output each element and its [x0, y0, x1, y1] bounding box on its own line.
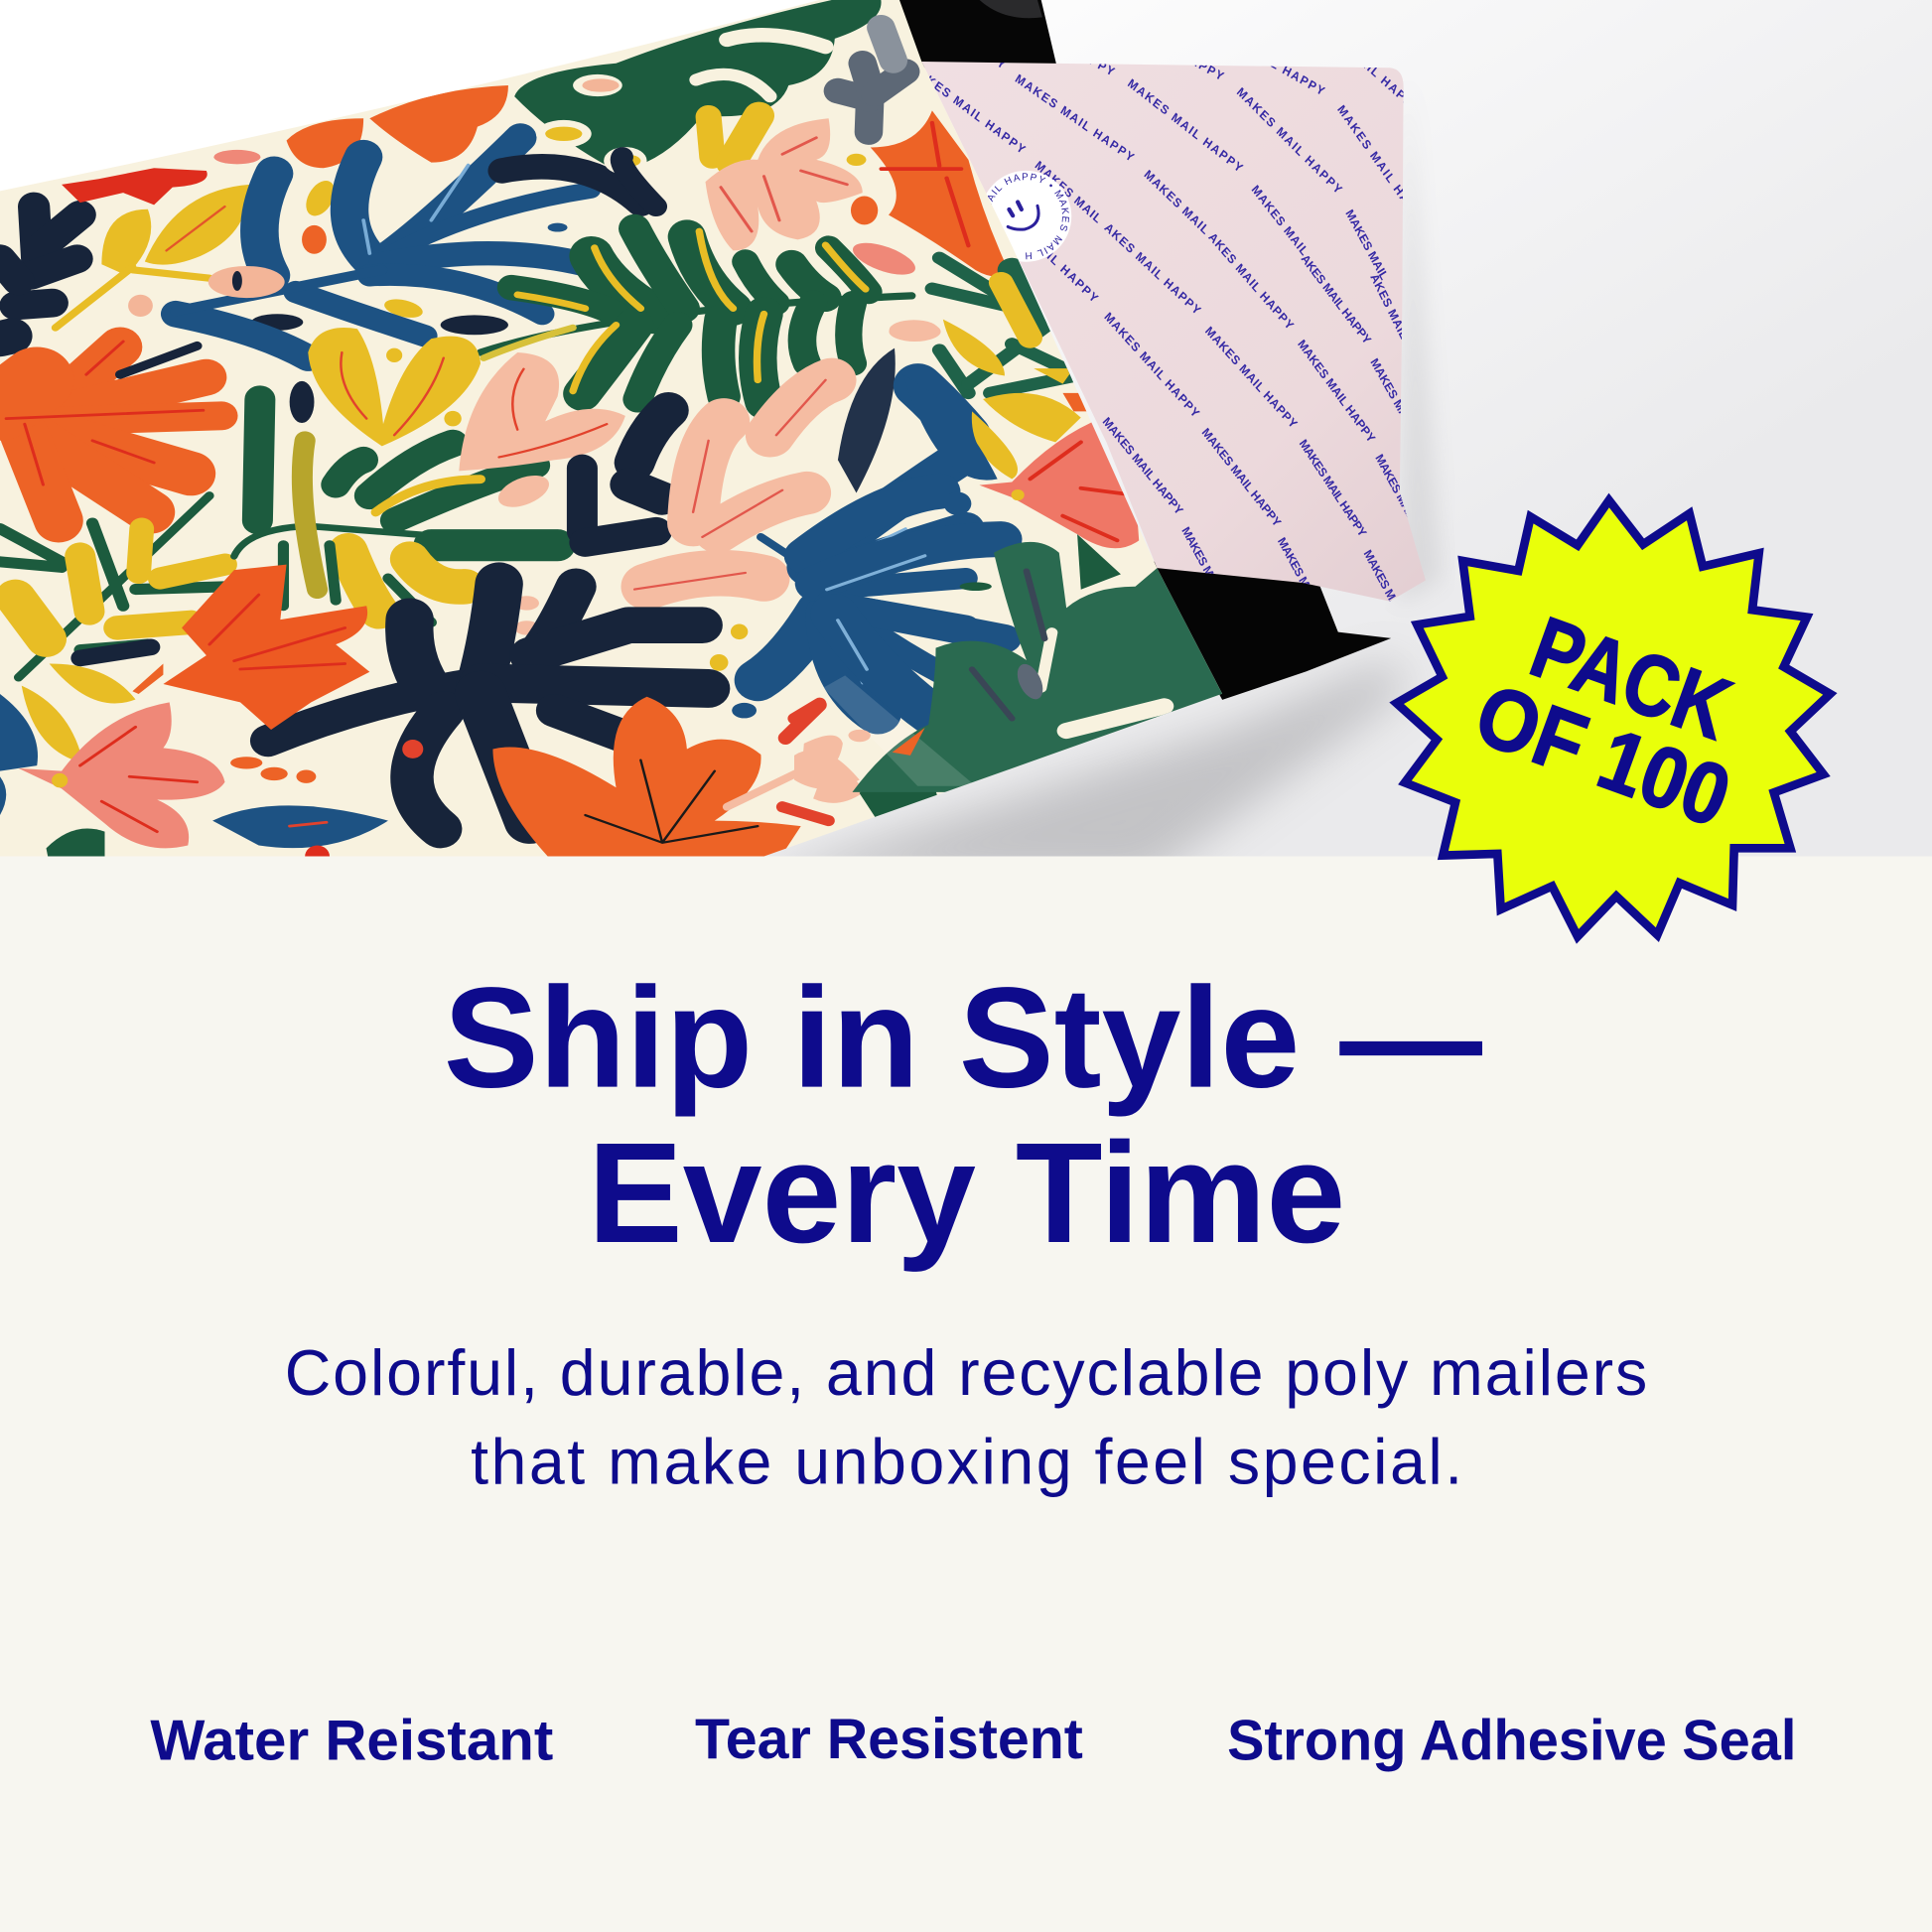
- red flower, top left: [62, 168, 207, 205]
- mailer shadows: [740, 73, 1442, 881]
- blue palm fronds, right: [805, 491, 1005, 725]
- studio backdrop: [0, 0, 1932, 857]
- feature labels: [150, 1708, 1796, 1772]
- repeated brand pattern: MAKES MAIL HAPPY: [1202, 324, 1300, 431]
- repeated brand pattern: MAKES MAIL HAPPY: [1295, 337, 1378, 445]
- black adhesive strip, bottom: [1146, 561, 1391, 700]
- small dots, lower centre: [514, 596, 819, 738]
- navy fern, upper left: [0, 207, 80, 339]
- pink inner mailer: [0, 0, 1479, 696]
- heading: [444, 958, 1482, 1273]
- repeated brand pattern: MAKES MAIL: [1342, 207, 1391, 282]
- floral artwork, right side: [794, 110, 1222, 792]
- subheading: [285, 1337, 1647, 1497]
- cream mailer base: [0, 0, 1232, 857]
- green and yellow branch, lower left: [0, 495, 228, 677]
- product photo panel: [0, 0, 1932, 856]
- repeated brand pattern: MAKES MAIL HAPPY: [1372, 452, 1439, 560]
- navy coral plant: [268, 584, 709, 829]
- dark navy leaves, centre: [582, 410, 668, 542]
- subheading: Colorful, durable, and recyclable poly mailers: [285, 1337, 1647, 1409]
- green fern, centre: [481, 228, 911, 402]
- black adhesive strip, top: [894, 0, 1057, 68]
- starburst shape: [1397, 500, 1830, 936]
- starburst badge: pack of 100: [1397, 500, 1830, 936]
- badge text: OF 100: [1463, 665, 1742, 846]
- repeated brand pattern: MAKES MAIL: [1142, 167, 1212, 237]
- repeated brand pattern: MAKES MAIL HAPPY: [1307, 9, 1422, 116]
- grey-navy sprig, top right: [838, 28, 905, 132]
- film sheen: [823, 675, 976, 786]
- repeated brand pattern: MAKES MAIL HAPPY: [906, 60, 1028, 157]
- blue wedge leaf: [903, 374, 998, 481]
- peach sprig and orange drop, lower edge: [794, 703, 925, 789]
- repeated brand pattern: MAKES MAIL HAPPY: [1178, 524, 1245, 632]
- peach flower, top: [706, 118, 863, 250]
- green monstera, bottom right: [852, 534, 1222, 792]
- orange flower, lower left: [163, 565, 369, 730]
- repeated brand pattern: MAKES MAIL HAPPY: [1334, 102, 1429, 230]
- repeated brand pattern: MAKES MAIL HAPPY: [1125, 76, 1245, 175]
- feature: tear resistant: Tear Resistent: [695, 1708, 1083, 1771]
- navy branch, top centre: [502, 167, 640, 204]
- repeated brand pattern: MAKES MAIL HAPPY: [1198, 16, 1327, 98]
- orange flower, bottom centre: [492, 697, 801, 864]
- floral outer mailer: [0, 0, 1232, 868]
- repeated brand pattern: MAKES MAIL HAPPY: [1013, 71, 1137, 165]
- repeated brand pattern: MAKES MAIL HAPPY: [1102, 310, 1202, 420]
- repeated brand pattern: AKES MAIL HAPPY: [1205, 230, 1297, 333]
- green monstera, top: [514, 0, 882, 207]
- big orange flower, left: [0, 342, 221, 520]
- repeated brand pattern: MAKES MAIL HAPPY: [1275, 535, 1341, 643]
- big peach leaves, centre right: [634, 380, 832, 590]
- feature: water resistant: Water Reistant: [150, 1709, 553, 1772]
- repeated brand pattern: MAKES MAIL HAPPY: [1367, 355, 1439, 470]
- repeated brand pattern: MAKES MAIL: [1249, 183, 1311, 258]
- peach sprig, bottom right: [727, 726, 949, 837]
- repeated brand pattern: MAKES MAIL HAPPY: [1199, 425, 1284, 529]
- floral artwork, left and centre: [0, 0, 966, 868]
- blue fern: [176, 138, 592, 358]
- blue dot: [944, 491, 971, 515]
- badge text: PACK: [1519, 598, 1742, 759]
- blue leaf, bottom: [0, 694, 388, 868]
- repeated brand pattern: MAKES MAIL HAPPY: [1100, 414, 1186, 517]
- navy spear leaf: [838, 348, 896, 493]
- centre palm frond: [234, 441, 558, 622]
- yellow heart leaves: [308, 328, 481, 446]
- feature: adhesive seal: Strong Adhesive Seal: [1227, 1709, 1796, 1772]
- repeated brand pattern: AKES MAIL HAPPY: [1102, 220, 1203, 318]
- small orange dots, bottom: [132, 663, 423, 783]
- repeated brand pattern: MAKES MAIL HAPPY: [1234, 84, 1345, 197]
- repeated brand pattern: MAKES MAIL HAPPY: [1297, 437, 1369, 539]
- green stalk and navy oval: [257, 381, 314, 520]
- repeated brand pattern: MAKES MAIL HAPPY: [1097, 1, 1226, 83]
- peach bud with navy eye: [128, 266, 285, 317]
- repeated brand pattern: MAKES MAIL HAPPY: [989, 196, 1101, 306]
- subheading: that make unboxing feel special.: [471, 1426, 1462, 1497]
- repeated brand pattern: AKES MAIL HAPPY: [1367, 271, 1433, 384]
- repeated brand pattern: MAKES MAIL: [1033, 158, 1104, 226]
- coral flower, by the edge: [979, 418, 1139, 548]
- smiley sticker: [987, 171, 1072, 262]
- coral flower, lower left: [19, 702, 224, 848]
- yellow butterfly bloom: [709, 115, 759, 163]
- orange blooms, top edge: [287, 85, 508, 168]
- blue palm, lower right: [758, 385, 966, 713]
- orange flower, upper right: [871, 110, 1009, 276]
- navy twig: [120, 345, 198, 374]
- heading: Every Time: [588, 1113, 1345, 1273]
- coral blob and dots: [213, 150, 568, 335]
- repeated brand pattern: AKES MAIL HAPPY: [1299, 252, 1374, 346]
- orange drop and small dots: [847, 154, 941, 342]
- badge text: [1463, 598, 1742, 846]
- heading: Ship in Style —: [444, 958, 1482, 1118]
- peach heart leaf: [459, 352, 625, 513]
- yellow petals, lower left: [22, 663, 136, 762]
- pink mailer body: [921, 62, 1426, 602]
- green sprigs and yellow leaves: [890, 258, 1092, 479]
- yellow leaves, top left: [56, 185, 249, 328]
- repeated brand pattern: MAKES MAIL HAPPY: [1361, 547, 1427, 656]
- repeated brand pattern: [881, 0, 1439, 656]
